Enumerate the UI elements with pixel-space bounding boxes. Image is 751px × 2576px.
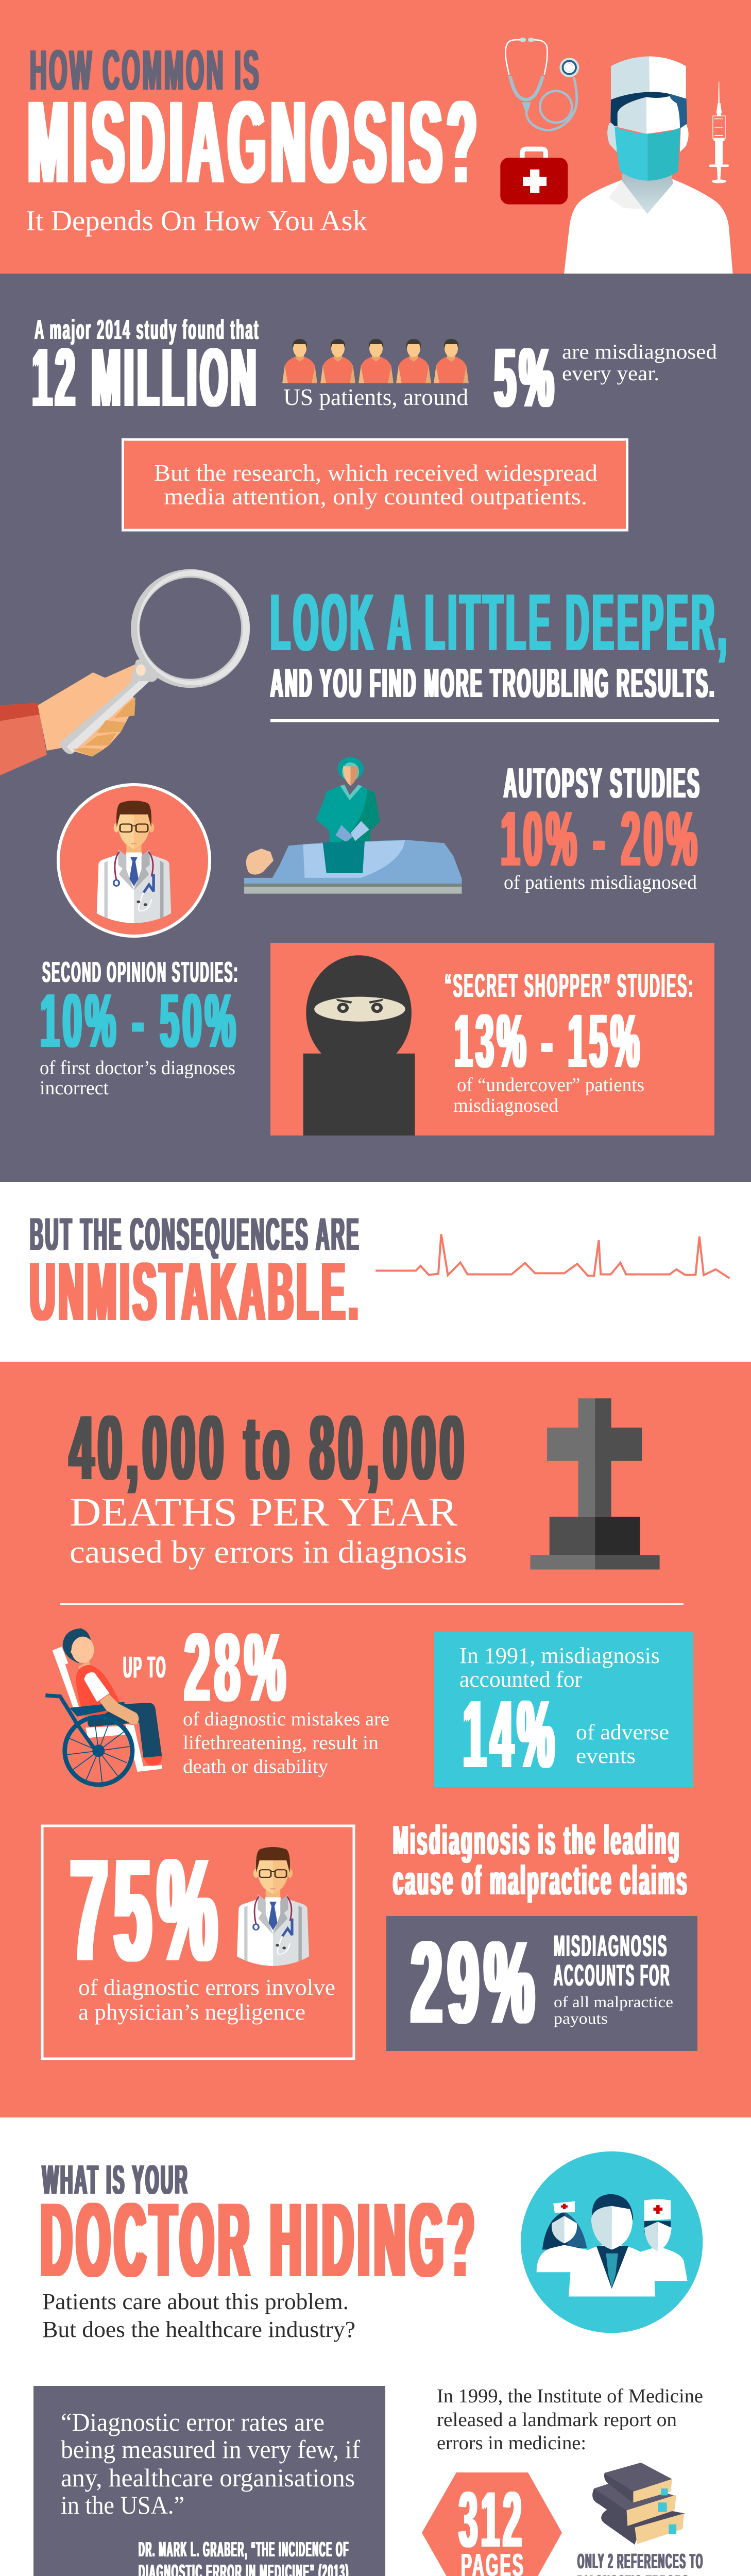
callout: only counted outpatients: But the research, which received widespread <box>154 460 598 486</box>
panel: secret shopper studies: misdiagnosed <box>453 1095 558 1116</box>
text: patients care <box>42 2289 355 2342</box>
text: are misdiagnosed every year <box>562 340 717 385</box>
text: are misdiagnosed every year: are misdiagnosed <box>562 340 717 363</box>
panel: 14 percent of adverse events: events <box>576 1744 636 1768</box>
panel: 29 percent of payouts: 29% <box>411 1918 540 2048</box>
heading: leading cause of malpractice claims <box>393 1817 689 1903</box>
panel: 14 percent of adverse events: accounted for <box>459 1667 582 1692</box>
section: outpatient study and deeper results: SECOND OPINION STUDIES: <box>42 956 239 989</box>
section: consequences heading <box>0 1182 751 1362</box>
caption: only 2 references <box>577 2549 704 2576</box>
text: diagnostic mistakes: lifethreatening, result in <box>183 1732 379 1754</box>
callout: only counted outpatients <box>123 439 627 530</box>
panel: graber quote: any, healthcare organisations <box>61 2463 355 2492</box>
text: patients care: But does the healthcare industry? <box>42 2317 355 2342</box>
text: diagnostic mistakes: death or disability <box>183 1756 328 1777</box>
panel: 14 percent of adverse events: 14% <box>463 1681 558 1788</box>
panel: 75 percent negligence <box>42 1826 354 2059</box>
text: diagnostic mistakes <box>183 1708 389 1777</box>
text: are misdiagnosed every year: every year. <box>562 362 659 385</box>
section: what is your doctor hiding <box>0 2117 751 2576</box>
text: second opinion studies: of first doctor’s diagnoses <box>40 1057 235 1079</box>
badge: 312 pages hexagon: 312 <box>459 2476 525 2564</box>
badge: 312 pages hexagon <box>422 2472 562 2576</box>
text: diagnostic mistakes: of diagnostic mistakes are <box>183 1708 389 1730</box>
panel: graber quote: “Diagnostic error rates are <box>61 2408 325 2436</box>
panel: 29 percent of payouts: of all malpractice <box>554 1993 673 2011</box>
panel: graber quote <box>33 2386 385 2576</box>
text: 1999 institute of medicine report <box>437 2385 703 2454</box>
icon: patient in wheelchair <box>45 1629 162 1785</box>
text: second opinion studies: incorrect <box>40 1077 109 1099</box>
section: what is your doctor hiding: WHAT IS YOUR <box>42 2157 189 2202</box>
icon row: five patients <box>282 339 469 383</box>
text: second opinion studies <box>40 956 239 1099</box>
panel: 14 percent of adverse events: of adverse <box>576 1721 669 1744</box>
icon: stack of books <box>592 2463 685 2545</box>
chart: heartbeat line coral <box>376 1234 729 1278</box>
icon: first aid kit <box>500 149 568 205</box>
text: patients care: Patients care about this problem. <box>42 2289 349 2314</box>
section: what is your doctor hiding: DR. MARK L. GRABER, “THE INCIDENCE OF <box>139 2537 349 2561</box>
icon: masked ninja shopper <box>303 955 415 1136</box>
section: outpatient study and deeper results: 12 MILLION <box>32 331 260 424</box>
section: outpatient study and deeper results <box>0 274 751 1182</box>
icon: surgeon with patient <box>244 757 462 894</box>
section: deaths and malpractice statistics <box>0 1362 751 2117</box>
section: hero header: HOW COMMON IS <box>30 39 261 102</box>
panel: 75 percent negligence: 75% <box>71 1828 224 1991</box>
panel: graber quote: being measured in very few, if <box>61 2435 360 2464</box>
section: hero header <box>0 0 751 274</box>
panel: 14 percent of adverse events: In 1991, misdiagnosis <box>459 1643 660 1668</box>
section: outpatient study and deeper results: A major 2014 study found that <box>35 314 260 345</box>
icon: gravestone cross <box>531 1398 660 1569</box>
caption: US patients, around: US patients, around <box>283 384 468 410</box>
text: 1999 institute of medicine report: errors in medicine: <box>437 2432 586 2454</box>
panel: 29 percent of payouts: payouts <box>554 2009 608 2027</box>
text: caused by errors in diagnosis: caused by errors in diagnosis <box>70 1535 467 1570</box>
icon: medical team in teal circle <box>521 2151 703 2333</box>
panel: secret shopper studies: of “undercover” patients <box>457 1074 644 1096</box>
section: deaths and malpractice statistics: 28% <box>184 1613 290 1721</box>
panel: secret shopper studies <box>270 943 714 1136</box>
panel: 14 percent of adverse events <box>434 1632 693 1788</box>
text: autopsy studies <box>501 759 701 893</box>
icon: doctor in coral circle <box>58 785 210 936</box>
panel: 75 percent negligence: a physician’s negligence <box>78 1999 305 2025</box>
icon: stethoscope <box>505 38 579 130</box>
icon: hand with magnifying glass <box>0 569 250 775</box>
icon: physician <box>237 1847 309 1966</box>
icon: syringe <box>709 81 729 183</box>
text: 1999 institute of medicine report: released a landmark report on <box>437 2409 677 2431</box>
icon: masked doctor <box>564 56 733 274</box>
subtitle: It Depends On How You Ask <box>26 205 367 237</box>
section: deaths and malpractice statistics: UP TO <box>123 1651 167 1684</box>
text: autopsy studies: of patients misdiagnosed <box>504 872 697 893</box>
text: 1999 institute of medicine report: In 1999, the Institute of Medicine <box>437 2385 703 2407</box>
section: outpatient study and deeper results: 10% - 50% <box>40 978 239 1063</box>
callout: only counted outpatients: media attention, only counted outpatients. <box>164 484 587 510</box>
panel: graber quote: in the USA.” <box>61 2490 184 2519</box>
text: deaths per year: DEATHS PER YEAR <box>70 1489 457 1534</box>
panel: 75 percent negligence: of diagnostic errors involve <box>78 1975 335 2000</box>
section: outpatient study and deeper results: 5% <box>494 330 557 425</box>
